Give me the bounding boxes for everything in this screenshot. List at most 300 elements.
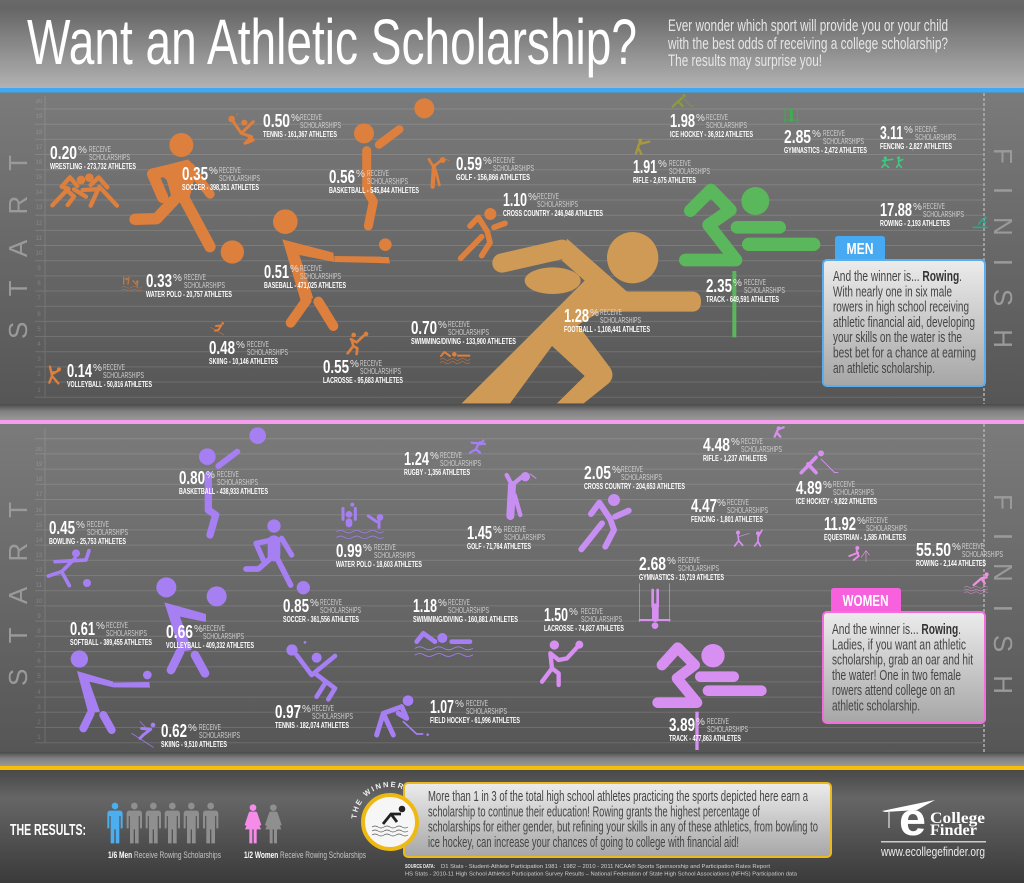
stat: baseball: 0.51 [264, 262, 289, 282]
stat: golf: SCHOLARSHIPS [493, 163, 534, 173]
icon: equestrian [849, 546, 869, 562]
stat: basketball: SCHOLARSHIPS [367, 176, 408, 186]
stat: basketball: BASKETBALL - 438,933 ATHLETES [179, 487, 268, 496]
stat: ice hockey: ICE HOCKEY - 36,912 ATHLETES [670, 130, 753, 139]
stat: track [669, 715, 748, 743]
panel: men: 6 [37, 312, 41, 318]
stat: golf: % [483, 156, 492, 167]
stat: gymnastics [784, 127, 867, 155]
stat: rugby: % [430, 451, 439, 462]
panel: women: 12 [36, 568, 43, 574]
stat: ice hockey: SCHOLARSHIPS [706, 120, 747, 130]
stat: gymnastics: 2.85 [784, 127, 811, 147]
stat: soccer: % [209, 166, 218, 177]
stat: rifle: RIFLE - 1,237 ATHLETES [703, 454, 767, 463]
panel: men: 7 [37, 296, 41, 302]
stat: swimming/diving: SCHOLARSHIPS [448, 605, 489, 615]
icon: swimming [415, 633, 473, 656]
stat: lacrosse: RECEIVE [360, 358, 382, 368]
stat: equestrian [824, 514, 907, 542]
panel: women: 13 [36, 553, 43, 559]
intro text [667, 17, 948, 70]
stat: tennis [275, 702, 353, 730]
stat: cross country: % [528, 192, 537, 203]
stat: gymnastics: SCHOLARSHIPS [678, 563, 719, 573]
icon: gymnastics [639, 583, 670, 629]
icon: ice hockey [801, 450, 838, 473]
panel: women: 17 [36, 492, 43, 498]
stat: swimming/diving: 0.70 [411, 318, 437, 338]
men statistics [50, 111, 964, 389]
stat: soccer [182, 164, 260, 192]
stat: golf: RECEIVE [504, 524, 526, 534]
stat: tennis: RECEIVE [300, 112, 322, 122]
stat: fencing: % [717, 498, 726, 509]
stat: cross country: SCHOLARSHIPS [537, 199, 578, 209]
stat: equestrian: % [857, 516, 866, 527]
stat: cross country [584, 463, 685, 491]
stat: wrestling: % [78, 145, 87, 156]
strip before footer [0, 752, 1024, 766]
source data: SOURCE DATA: [405, 864, 435, 870]
stat: golf: SCHOLARSHIPS [504, 532, 545, 542]
stat: water polo: 0.33 [146, 271, 172, 291]
icon: track [658, 644, 761, 750]
icon: rugby [470, 441, 485, 453]
stat: lacrosse: LACROSSE - 95,683 ATHLETES [323, 376, 403, 385]
stat: swimming/diving: SWIMMING/DIVING - 160,881 ATHLETES [413, 615, 518, 624]
icon: baseball [273, 209, 392, 326]
text box: women: rowers attend college on an [832, 682, 955, 699]
stat: field hockey: FIELD HOCKEY - 61,996 ATHLETES [430, 716, 520, 725]
stat: rifle: SCHOLARSHIPS [741, 444, 782, 454]
icon: football [462, 232, 701, 403]
panel: men: 3 [37, 357, 41, 363]
stat: softball [70, 619, 152, 647]
text box: women [823, 612, 985, 723]
stat: football: FOOTBALL - 1,108,441 ATHLETES [564, 325, 650, 334]
stat: gymnastics: RECEIVE [678, 555, 700, 565]
stat: golf: RECEIVE [493, 155, 515, 165]
stat: lacrosse [323, 357, 403, 385]
icon: field hockey [377, 695, 429, 736]
stat: skiing: 0.62 [161, 721, 187, 741]
stat: gymnastics: SCHOLARSHIPS [823, 136, 864, 146]
stat: track: TRACK - 477,863 ATHLETES [669, 734, 741, 743]
women figures, right group [507, 426, 989, 750]
stat: fencing: SCHOLARSHIPS [727, 505, 768, 515]
men figures, left group [49, 98, 505, 383]
icon: ice hockey [673, 94, 694, 107]
stat: track: % [733, 278, 742, 289]
stat: soccer: SOCCER - 361,556 ATHLETES [283, 615, 359, 624]
pictogram: men [107, 803, 218, 843]
source data [405, 863, 798, 878]
icon: tennis [286, 641, 335, 699]
stat: wrestling: WRESTLING - 273,732 ATHLETES [50, 162, 136, 171]
stat: rowing: 17.88 [880, 200, 912, 220]
stat: gymnastics: % [667, 556, 676, 567]
stat: field hockey: SCHOLARSHIPS [466, 706, 507, 716]
panel: women: 7 [37, 644, 41, 650]
stat: rifle: 4.48 [703, 435, 730, 455]
stat: basketball: % [356, 169, 365, 180]
men figures, right group [462, 94, 987, 403]
stat: rowing: ROWING - 2,193 ATHLETES [880, 219, 950, 228]
icon: skiing [132, 722, 155, 747]
strip between panels [0, 404, 1024, 420]
stat: volleyball: 0.14 [67, 361, 92, 381]
stat: skiing: SCHOLARSHIPS [247, 347, 288, 357]
panel: women: 19 [36, 462, 43, 468]
stat: volleyball: % [194, 624, 203, 635]
stat: rugby: RUGBY - 1,356 ATHLETES [404, 468, 470, 477]
stat: basketball: SCHOLARSHIPS [217, 477, 258, 487]
panel: women: 16 [36, 508, 43, 514]
stat: baseball: RECEIVE [300, 263, 322, 273]
stat: skiing: SKIING - 10,146 ATHLETES [209, 357, 278, 366]
stat: track: SCHOLARSHIPS [744, 285, 785, 295]
stat: rowing: SCHOLARSHIPS [923, 209, 964, 219]
panel: men [0, 88, 1024, 404]
stat: fencing: % [904, 125, 913, 136]
stat: basketball: 0.80 [179, 468, 205, 488]
icon: water polo [122, 277, 142, 291]
stat: skiing: SKIING - 9,510 ATHLETES [161, 740, 227, 749]
panel: women: 20 [36, 447, 43, 453]
text box: men [823, 260, 985, 386]
stat: cross country: 1.10 [503, 190, 527, 210]
stat: volleyball: 0.66 [166, 622, 193, 642]
winner callout box: scholarship to continue their education! Rowing grants the highest percentage of [428, 803, 761, 820]
winner callout box: More than 1 in 3 of the total high school athletes practicing the sports depicted here earn a [428, 788, 808, 805]
panel: men: 18 [36, 130, 43, 136]
stat: baseball: BASEBALL - 471,025 ATHLETES [264, 281, 346, 290]
icon: cross country [581, 494, 629, 549]
stat: water polo: WATER POLO - 18,603 ATHLETES [336, 560, 422, 569]
icon: soccer [246, 519, 310, 594]
panel: women [0, 420, 1024, 752]
pictogram: women [245, 804, 282, 843]
stat: track [706, 276, 785, 304]
icon: volleyball [156, 577, 227, 673]
stat: basketball: RECEIVE [217, 469, 239, 479]
tab: women [831, 588, 901, 612]
stat: gymnastics: RECEIVE [823, 128, 845, 138]
logo: college finder [880, 793, 986, 859]
stat: golf: % [493, 525, 502, 536]
panel: men: 8 [37, 281, 41, 287]
stat: rowing: % [913, 202, 922, 213]
icon: softball [71, 650, 152, 730]
stat: basketball [329, 167, 419, 195]
stat: soccer: 0.35 [182, 164, 208, 184]
stat: soccer: RECEIVE [219, 165, 241, 175]
stat: soccer: SOCCER - 398,351 ATHLETES [182, 183, 259, 192]
stat: soccer: % [310, 598, 319, 609]
stat: golf: GOLF - 71,764 ATHLETES [467, 542, 531, 551]
stat: skiing: RECEIVE [247, 339, 269, 349]
text box: women: And the winner is... Rowing. [832, 621, 961, 638]
stat: bowling: SCHOLARSHIPS [87, 527, 128, 537]
stat: rowing: % [952, 542, 961, 553]
stat: rugby [404, 449, 481, 477]
text box: men: your skills on the water is the [833, 329, 962, 346]
stat: rowing: 55.50 [916, 540, 951, 560]
stat: ice hockey: RECEIVE [833, 479, 855, 489]
stat: bowling: 0.45 [49, 518, 75, 538]
stat: golf: 1.45 [467, 523, 492, 543]
tab: men: MEN [846, 241, 874, 258]
caption: women: 1/2 Women Receive Rowing Scholarships [244, 850, 366, 860]
stat: field hockey: 1.07 [430, 697, 454, 717]
stat: softball: % [96, 621, 105, 632]
stat: tennis: 0.97 [275, 702, 301, 722]
stat: soccer: SCHOLARSHIPS [320, 605, 361, 615]
panel: women: 14 [36, 538, 43, 544]
stat: field hockey: RECEIVE [466, 698, 488, 708]
stat: rifle [633, 157, 710, 185]
panel: women: 11 [36, 583, 43, 589]
stat: gymnastics: GYMNASTICS - 2,472 ATHLETES [784, 146, 867, 155]
panel: women: 9 [37, 614, 41, 620]
stat: fencing: FENCING - 2,827 ATHLETES [880, 142, 952, 151]
stat: lacrosse: LACROSSE - 74,827 ATHLETES [544, 624, 624, 633]
stat: gymnastics [639, 554, 724, 582]
stat: rugby: RECEIVE [440, 450, 462, 460]
panel: men: 4 [37, 342, 41, 348]
stat: baseball [264, 262, 346, 290]
stat: basketball: RECEIVE [367, 168, 389, 178]
stat: rowing [916, 540, 1003, 568]
stat: fencing [880, 123, 956, 151]
stat: volleyball: VOLLEYBALL - 50,816 ATHLETES [67, 380, 152, 389]
stat: rifle: % [731, 437, 740, 448]
stat: water polo [146, 271, 232, 299]
stat: bowling: RECEIVE [87, 519, 109, 529]
icon: bowling [48, 549, 91, 587]
stat: volleyball: VOLLEYBALL - 409,332 ATHLETES [166, 641, 254, 650]
icon: golf [507, 472, 536, 516]
stat: water polo: SCHOLARSHIPS [184, 280, 225, 290]
footer panel: results [0, 766, 1024, 883]
stat: rifle: RIFLE - 2,675 ATHLETES [633, 176, 696, 185]
stat: lacrosse: % [569, 607, 578, 618]
stat: football [564, 306, 650, 334]
stat: baseball: SCHOLARSHIPS [300, 271, 341, 281]
panel: men: 20 [36, 99, 43, 105]
icon: gymnastics [784, 108, 799, 123]
stat: water polo: RECEIVE [374, 542, 396, 552]
stat: ice hockey: % [823, 480, 832, 491]
stat: water polo: % [363, 543, 372, 554]
stat: football: 1.28 [564, 306, 589, 326]
stat: basketball [179, 468, 268, 496]
stat: soccer [283, 596, 361, 624]
icon: fencing [735, 530, 762, 546]
text box: men: With nearly one in six male [833, 283, 952, 300]
stat: soccer: SCHOLARSHIPS [219, 173, 260, 183]
logo: college finder: College [930, 810, 985, 827]
stat: water polo: SCHOLARSHIPS [374, 550, 415, 560]
stat: track: 3.89 [669, 715, 695, 735]
heading: the results: THE RESULTS: [10, 822, 86, 839]
stat: fencing [691, 496, 768, 524]
stat: skiing: RECEIVE [199, 722, 221, 732]
stat: tennis: SCHOLARSHIPS [300, 120, 341, 130]
stat: volleyball [166, 622, 254, 650]
stat: baseball: % [290, 264, 299, 275]
finish label: women: FINISH [988, 494, 1018, 694]
stat: skiing [161, 721, 240, 749]
stat: lacrosse: SCHOLARSHIPS [581, 614, 622, 624]
stat: volleyball: % [93, 363, 102, 374]
panel: men: 19 [36, 114, 43, 120]
stat: fencing: 4.47 [691, 496, 717, 516]
stat: ice hockey: ICE HOCKEY - 9,822 ATHLETES [796, 497, 877, 506]
stat: basketball: BASKETBALL - 545,844 ATHLETES [329, 186, 419, 195]
icon: golf [429, 157, 449, 187]
stat: ice hockey: 4.89 [796, 478, 822, 498]
stat: rowing: RECEIVE [962, 541, 984, 551]
panel: women: 2 [37, 720, 41, 726]
text box: men: And the winner is... Rowing. [833, 268, 962, 285]
winner callout box: ice hockey, can increase your chances of going to college with financial aid! [428, 834, 739, 851]
panel: women: 3 [37, 705, 41, 711]
stat: volleyball: RECEIVE [203, 623, 225, 633]
winner callout box [404, 783, 831, 857]
stat: basketball: 0.56 [329, 167, 355, 187]
icon: lacrosse [542, 640, 583, 685]
stat: lacrosse [544, 605, 624, 633]
source data: HS Stats - 2010-11 High School Athletics Participation Survey Results – National Federation of State High School Associations (NFHS) Participation data [405, 872, 798, 878]
stat: tennis: SCHOLARSHIPS [312, 711, 353, 721]
start label: men: START [3, 155, 33, 339]
stat: rugby: 1.24 [404, 449, 429, 469]
stat: skiing: 0.48 [209, 338, 235, 358]
stat: swimming/diving: SWIMMING/DIVING - 133,900 ATHLETES [411, 337, 516, 346]
stat: fencing: SCHOLARSHIPS [915, 132, 956, 142]
icon: rowing [973, 216, 987, 227]
stat: football: SCHOLARSHIPS [600, 315, 641, 325]
badge: the winner [351, 782, 419, 851]
stat: bowling: BOWLING - 25,753 ATHLETES [49, 537, 126, 546]
stat: fencing: RECEIVE [727, 497, 749, 507]
panel: men: 5 [37, 327, 41, 333]
intro text: The results may surprise you! [668, 52, 822, 70]
icon: tennis [228, 114, 253, 143]
stat: rifle: 1.91 [633, 157, 657, 177]
stat: golf [456, 154, 534, 182]
panel: men: 1 [37, 388, 41, 394]
stat: skiing: % [236, 340, 245, 351]
women statistics [49, 435, 1003, 749]
icon: volleyball [49, 367, 61, 383]
stat: golf [467, 523, 545, 551]
stat: lacrosse: RECEIVE [581, 606, 603, 616]
stat: wrestling [50, 143, 136, 171]
stat: cross country: CROSS COUNTRY - 204,653 ATHLETES [584, 482, 685, 491]
stat: fencing: FENCING - 1,801 ATHLETES [691, 515, 763, 524]
stat: rifle: RECEIVE [669, 158, 691, 168]
tab: men [835, 236, 885, 260]
panel: women: 18 [36, 477, 43, 483]
stat: field hockey: % [455, 699, 464, 710]
panel: women: 10 [36, 599, 43, 605]
panel: men: 9 [37, 266, 41, 272]
stat: swimming/diving: % [438, 320, 447, 331]
stat: cross country: 2.05 [584, 463, 611, 483]
panel: men: 13 [36, 205, 43, 211]
stat: ice hockey: RECEIVE [706, 112, 728, 122]
stat: bowling: % [76, 520, 85, 531]
icon: fencing [882, 156, 903, 167]
stat: tennis: 0.50 [263, 111, 290, 131]
stat: volleyball: SCHOLARSHIPS [103, 370, 144, 380]
stat: softball: SCHOLARSHIPS [106, 628, 147, 638]
panel: men: 17 [36, 145, 43, 151]
logo: college finder: Finder [930, 822, 977, 839]
stat: track: % [696, 717, 705, 728]
logo: college finder: e [899, 793, 926, 845]
panel: men: 14 [36, 190, 43, 196]
source data: D1 Stats - Student-Athlete Participation 1981 - 1982 – 2010 - 2011 NCAA® Sports Sponsorship and Participation Rates Report [441, 863, 770, 870]
stat: rifle: RECEIVE [741, 436, 763, 446]
stat: softball: 0.61 [70, 619, 95, 639]
stat: skiing [209, 338, 288, 366]
title: Want an Athletic Scholarship? [27, 6, 637, 78]
stat: fencing: RECEIVE [915, 124, 937, 134]
stat: volleyball [67, 361, 152, 389]
header band [0, 0, 1024, 88]
stat: lacrosse: % [350, 359, 359, 370]
panel: women: 1 [37, 735, 41, 741]
stat: tennis: % [302, 704, 311, 715]
text box: men: an athletic scholarship. [833, 360, 935, 377]
stat: lacrosse: SCHOLARSHIPS [360, 366, 401, 376]
tab: women: WOMEN [842, 593, 888, 610]
stat: gymnastics: GYMNASTICS - 19,719 ATHLETES [639, 573, 724, 582]
stat: swimming/diving: RECEIVE [448, 319, 470, 329]
stat: golf: 0.59 [456, 154, 482, 174]
text box: women: the water! One in two female [832, 667, 961, 684]
stat: tennis: % [291, 113, 300, 124]
panel: men: 2 [37, 372, 41, 378]
stat: softball: SOFTBALL - 389,455 ATHLETES [70, 638, 152, 647]
stat: cross country [503, 190, 603, 218]
stat: track: RECEIVE [707, 716, 729, 726]
panel: men: 12 [36, 221, 43, 227]
stat: cross country: % [612, 465, 621, 476]
badge: the winner: THE WINNER [351, 782, 404, 818]
stat: track: 2.35 [706, 276, 732, 296]
stat: lacrosse: 1.50 [544, 605, 568, 625]
panel: men: 15 [36, 175, 43, 181]
stat: volleyball: SCHOLARSHIPS [203, 631, 244, 641]
icon: rifle [775, 426, 784, 437]
icon: wrestling [52, 173, 117, 206]
stat: equestrian: SCHOLARSHIPS [866, 523, 907, 533]
stat: rugby: SCHOLARSHIPS [440, 458, 481, 468]
stat: wrestling: RECEIVE [89, 144, 111, 154]
icon: basketball [199, 427, 266, 535]
stat: gymnastics: % [812, 129, 821, 140]
icon: soccer [135, 133, 244, 264]
stat: swimming/diving: % [438, 598, 447, 609]
icon: rowing [964, 572, 989, 593]
panel: women: 6 [37, 659, 41, 665]
text box: women: athletic scholarship. [832, 698, 920, 714]
